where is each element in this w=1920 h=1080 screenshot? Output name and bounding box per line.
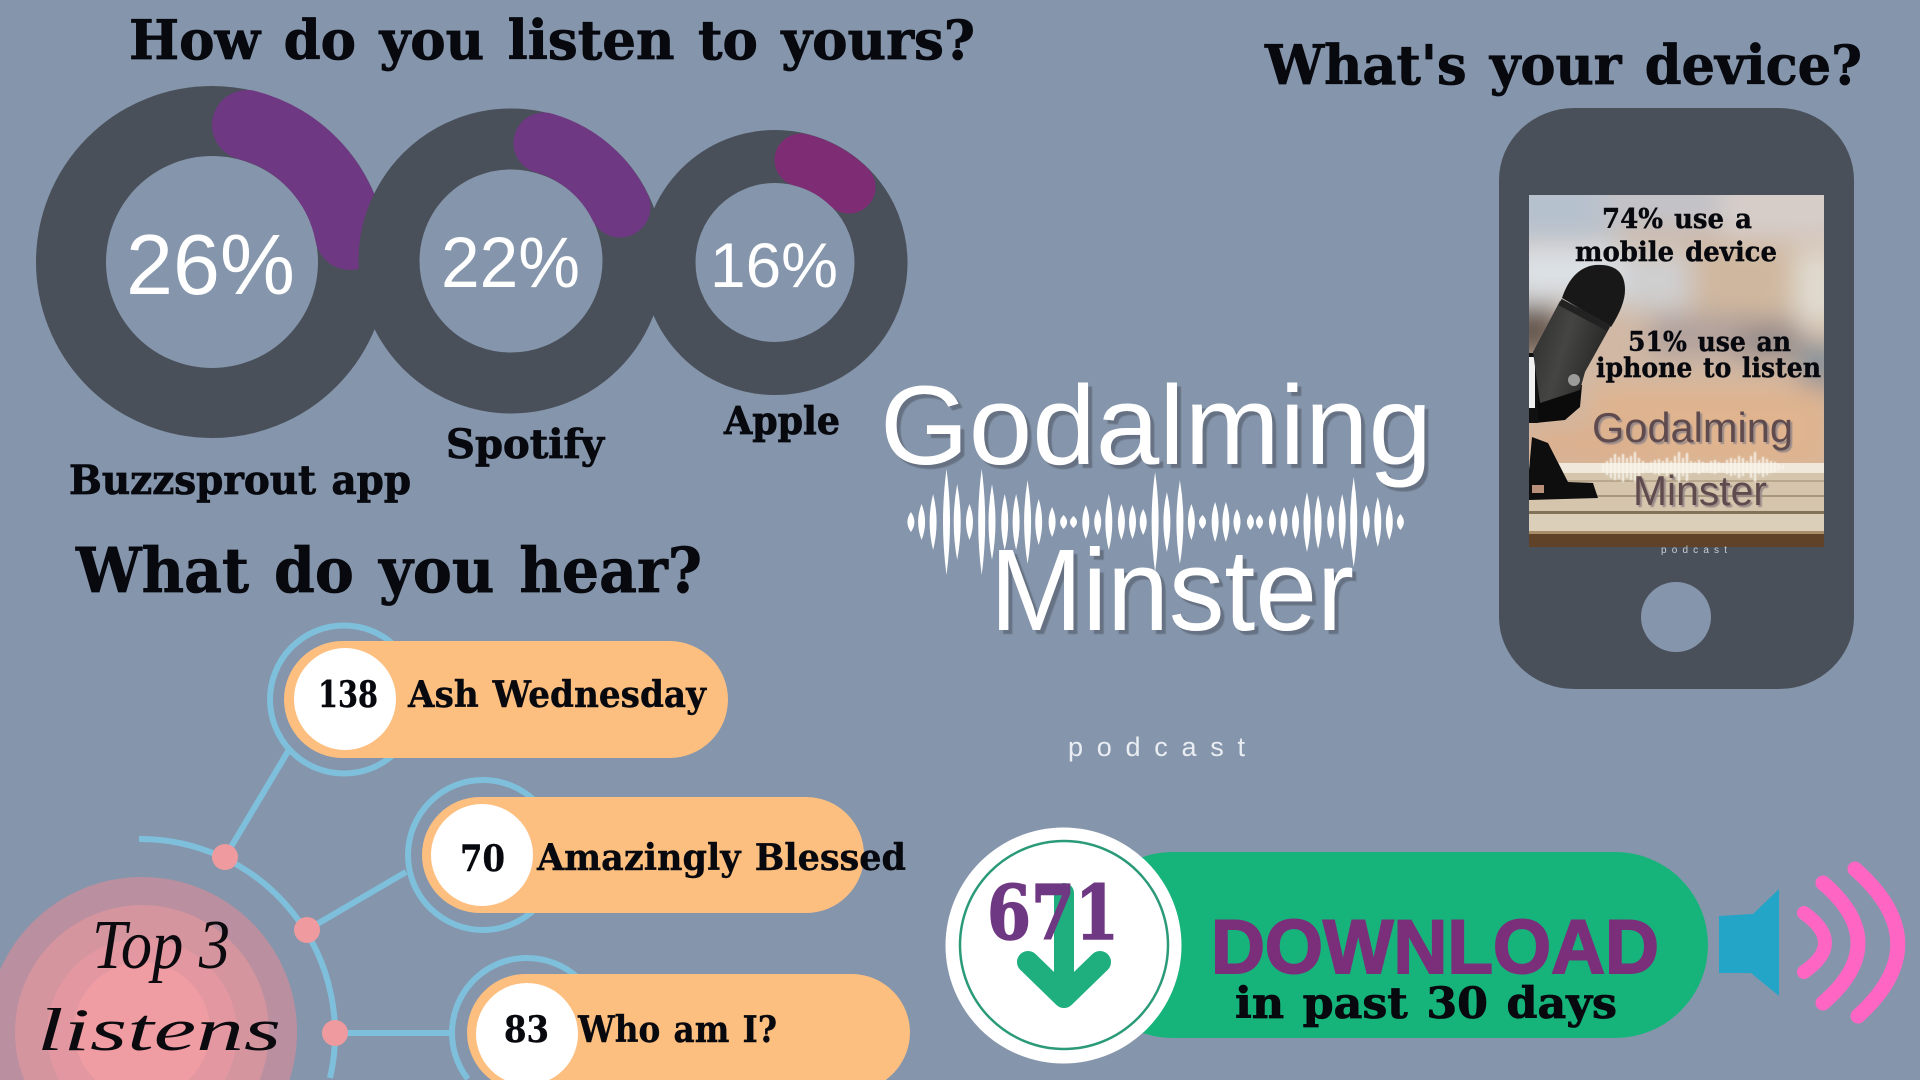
- list item: Ash Wednesday 138: [270, 626, 728, 774]
- phone stat text: 74% use a: [1602, 204, 1752, 235]
- heading: what's your device: What's your device?: [1264, 33, 1862, 97]
- download word: DOWNLOAD: [1211, 905, 1659, 990]
- list item: Who am I? 83: [452, 958, 910, 1080]
- label: Spotify: Spotify: [446, 421, 606, 468]
- phone panel: [1499, 108, 1854, 689]
- connector arc and branches: [139, 748, 452, 1078]
- green pill: [1080, 852, 1708, 1038]
- top 3 hub: concentric pink circles: [0, 877, 297, 1080]
- donut chart: Spotify 22%: [389, 139, 633, 383]
- donut chart: Apple 16%: 16%: [710, 231, 838, 301]
- hub label: Top 3 listens: listens: [37, 997, 281, 1063]
- hub label: Top 3 listens: Top 3: [92, 907, 230, 984]
- list item: Amazingly Blessed 70: [408, 780, 906, 930]
- audio waveform: [907, 469, 1404, 575]
- connector nodes: [212, 844, 348, 1046]
- label: Apple: Apple: [723, 398, 840, 443]
- donut chart: Spotify 22%: 22%: [441, 224, 580, 303]
- mini podcast logo on phone: [1592, 404, 1793, 556]
- heading: what do you hear: What do you hear?: [75, 534, 702, 607]
- donut chart: Buzzsprout app 26%: [71, 121, 353, 403]
- donut chart: Apple 16%: [669, 156, 881, 368]
- list item: Who am I? 83: Who am I?: [577, 1009, 777, 1051]
- logo word: Minster: Minster: [990, 525, 1354, 655]
- screen photo: microphone on table: [1529, 195, 1824, 547]
- central logo: Godalming Minster: [880, 363, 1432, 762]
- logo word: podcast: podcast: [1068, 732, 1245, 762]
- list item: Amazingly Blessed 70: Amazingly Blessed: [536, 837, 906, 879]
- logo word: Godalming: Godalming: [880, 363, 1432, 488]
- download badge: [946, 828, 1708, 1064]
- list item: Amazingly Blessed 70: 70: [460, 838, 505, 880]
- phone body: [1499, 108, 1854, 689]
- donut chart: Buzzsprout app 26%: 26%: [126, 218, 295, 313]
- phone stat text: mobile device: [1575, 237, 1777, 268]
- download caption: in past 30 days: [1235, 979, 1617, 1029]
- phone stat text: [1575, 204, 1821, 384]
- table planks: [1529, 473, 1824, 511]
- mini podcast logo on phone: podcast: [1661, 545, 1727, 556]
- white circle with ring: [946, 828, 1182, 1064]
- list item: Who am I? 83: 83: [504, 1009, 549, 1051]
- phone stat text: 51% use an: [1628, 327, 1791, 358]
- mini podcast logo on phone: Minster: [1633, 467, 1767, 514]
- down arrow icon: [1028, 893, 1100, 997]
- phone stat text: iphone to listen: [1596, 353, 1821, 384]
- hub label: Top 3 listens: [37, 907, 281, 1063]
- mini podcast logo on phone: Godalming: [1592, 404, 1793, 451]
- label: Buzzsprout app: Buzzsprout app: [69, 457, 411, 504]
- phone home button: [1641, 582, 1711, 652]
- icon: speaker with sound waves: [1719, 869, 1898, 1016]
- microphone: [1529, 265, 1625, 500]
- list item: Ash Wednesday 138: Ash Wednesday: [407, 674, 707, 716]
- list item: Ash Wednesday 138: 138: [318, 674, 378, 716]
- heading: how do you listen: How do you listen to yours?: [129, 8, 975, 72]
- download count: 671: [987, 869, 1119, 957]
